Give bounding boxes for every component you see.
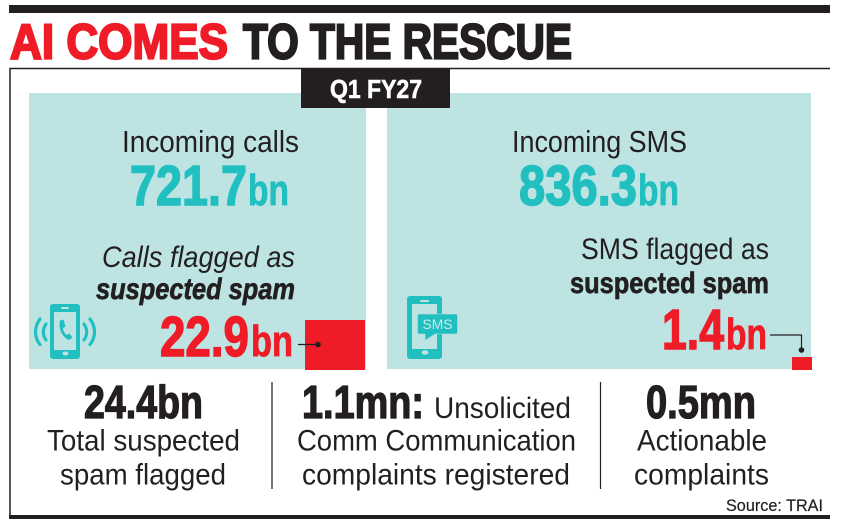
SMS unit: bn: [638, 166, 679, 215]
stat: total spam: 24.4bn: [84, 376, 203, 428]
stat: actionable complaints: complaints: [634, 458, 769, 492]
SMS flagged label: SMS flagged as: [581, 233, 769, 266]
bar: calls flagged: [305, 320, 365, 370]
stat: total spam: [47, 376, 240, 492]
SMS label: Incoming SMS: [512, 124, 687, 159]
calls spam unit: bn: [251, 317, 293, 366]
panel: incoming SMS: [387, 93, 811, 369]
icon: SMS phone: [407, 296, 458, 359]
calls suspected spam: suspected spam: [96, 273, 295, 306]
calls value: 721.7: [130, 154, 247, 218]
SMS spam value: 1.4: [662, 298, 724, 362]
period tab: Q1 FY27: [330, 74, 422, 104]
stat: actionable complaints: Actionable: [637, 424, 767, 458]
panel: incoming calls: [29, 93, 366, 369]
stat: total spam: Total suspected: [47, 424, 240, 458]
stat: UCC complaints: Comm Communication: [297, 424, 576, 458]
stat: UCC complaints: Unsolicited: [434, 392, 571, 425]
leader line: SMS: [770, 335, 804, 353]
icon: SMS phone: SMS: [422, 316, 452, 332]
stat: UCC complaints: 1.1mn:: [302, 376, 424, 428]
stat: UCC complaints: [297, 376, 576, 492]
bar: SMS flagged: [792, 357, 812, 370]
title: TO THE RESCUE: [243, 16, 572, 70]
stat: total spam: spam flagged: [60, 458, 226, 492]
SMS value: 836.3: [519, 154, 637, 218]
stat: UCC complaints: complaints registered: [302, 458, 570, 492]
SMS suspected spam: suspected spam: [570, 267, 769, 300]
stat: actionable complaints: [634, 376, 769, 492]
leader line: calls: [298, 342, 321, 347]
title: AI COMES: [10, 16, 228, 70]
SMS spam unit: bn: [726, 310, 767, 359]
stat: actionable complaints: 0.5mn: [646, 376, 756, 428]
calls label: Incoming calls: [122, 124, 299, 159]
title: [10, 16, 572, 70]
source: Source: TRAI: [726, 496, 823, 515]
calls flagged label: Calls flagged as: [102, 241, 295, 274]
period tab: [301, 68, 450, 108]
calls unit: bn: [248, 166, 289, 215]
icon: ringing phone: [36, 304, 94, 359]
calls spam value: 22.9: [160, 305, 249, 369]
